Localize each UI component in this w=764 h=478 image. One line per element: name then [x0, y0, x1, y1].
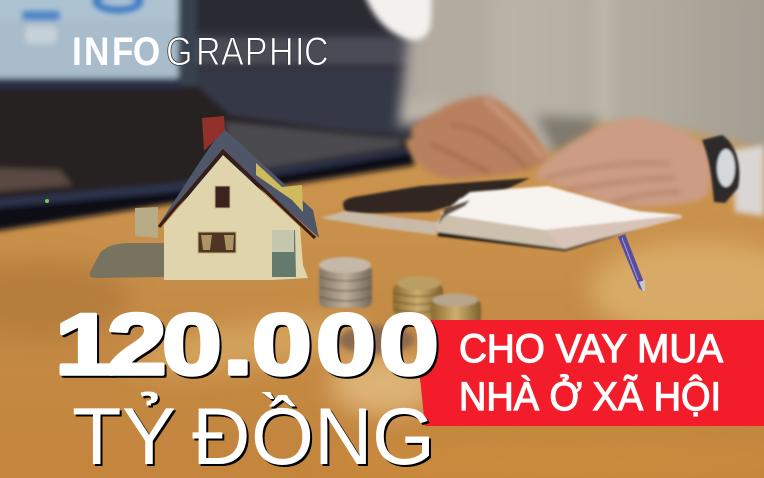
house balcony	[256, 163, 303, 212]
banner text	[459, 327, 723, 419]
house curtains	[201, 235, 234, 250]
photo: right hand	[535, 117, 711, 207]
icon: blue blurred screen details	[22, 0, 140, 44]
photo: coin stacks	[319, 257, 481, 354]
illustration: model house	[90, 116, 319, 280]
icon: wristwatch	[702, 135, 739, 203]
photo: wood grain highlights	[0, 240, 764, 478]
icon: purple pen	[618, 234, 645, 292]
coin stack two	[393, 276, 443, 316]
house lower window	[198, 232, 236, 253]
house front wall	[164, 155, 308, 280]
headline: amount: 120.000	[55, 296, 439, 393]
house garden base	[90, 243, 165, 278]
house chimney	[202, 116, 225, 151]
photo: smartphone	[343, 178, 530, 214]
infographic label	[72, 28, 329, 74]
coin stack three	[431, 294, 481, 324]
blurred coins behind number	[338, 326, 414, 354]
red banner	[420, 320, 764, 426]
label bold part: INFO	[72, 29, 160, 73]
photo: shirt	[398, 0, 764, 155]
photo: left hand	[410, 96, 548, 179]
house roof edge	[159, 151, 315, 238]
photo: laptop power light	[45, 199, 49, 203]
house roof	[158, 128, 319, 238]
photo: open notebook	[320, 186, 682, 251]
banner line one: CHO VAY MUA	[459, 327, 723, 371]
photo: blurred laptop and dark background	[0, 0, 430, 232]
coin stack one	[319, 257, 372, 308]
photo: white shirt cuff	[732, 145, 764, 216]
photo: white blurred shape	[362, 0, 432, 40]
label light part: GRAPHIC	[166, 28, 329, 74]
house back wall	[135, 207, 158, 238]
banner line two: NHÀ Ở XÃ HỘI	[459, 373, 721, 419]
house doorway	[272, 230, 296, 277]
house upper window	[215, 186, 230, 208]
